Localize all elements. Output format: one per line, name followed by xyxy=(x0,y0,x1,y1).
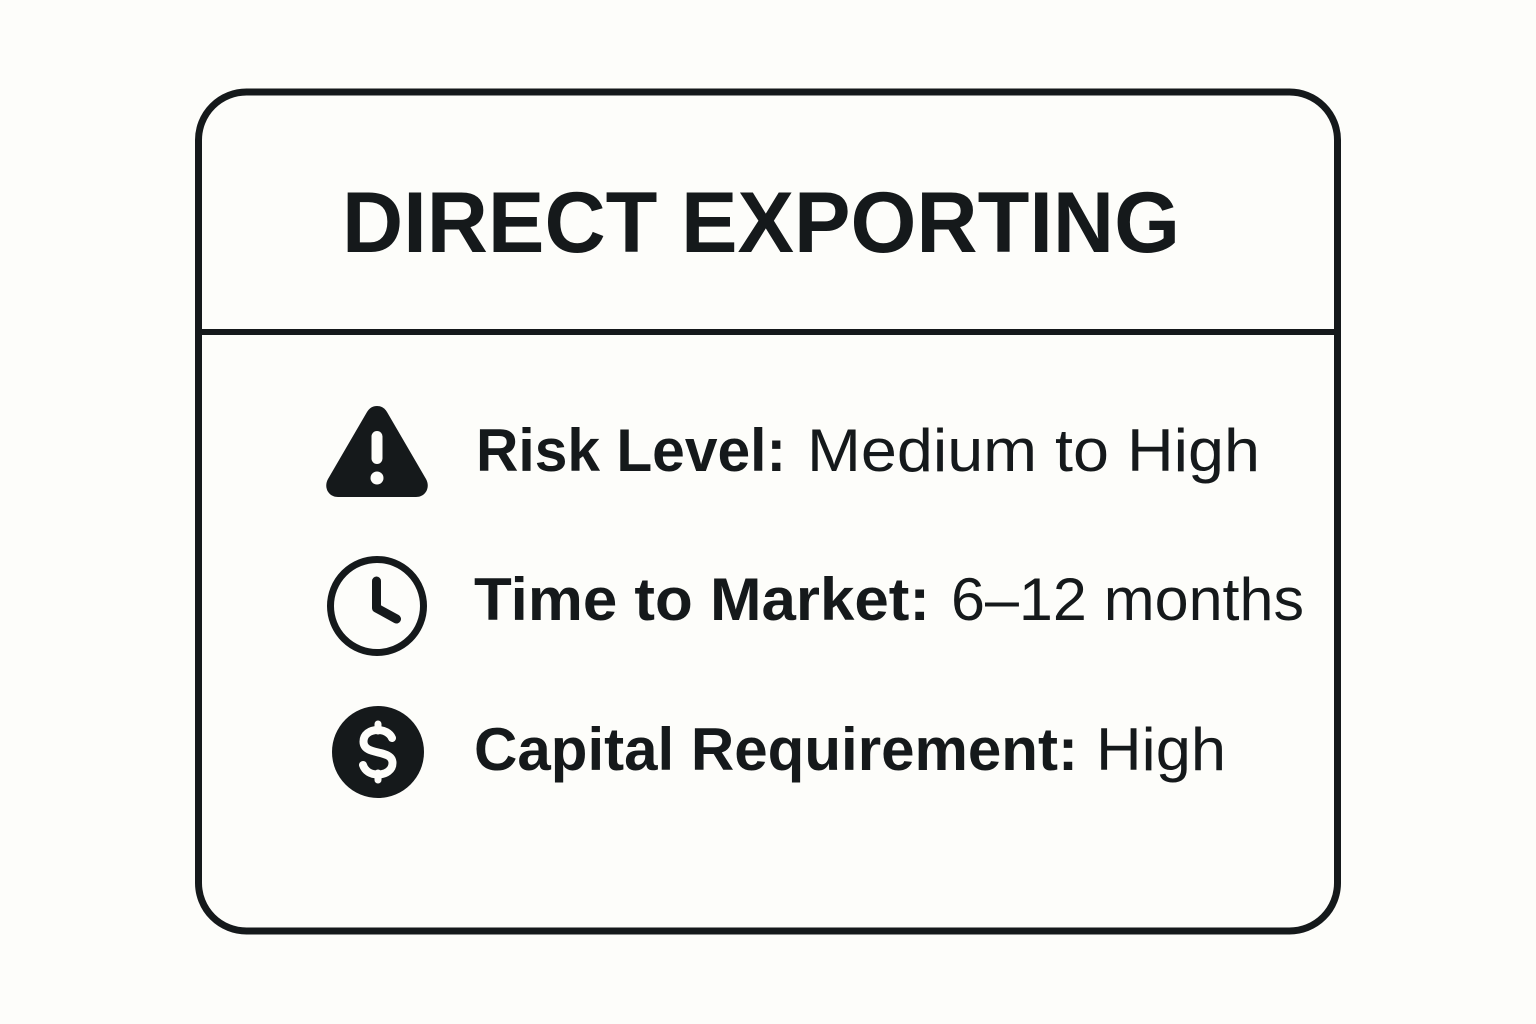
row: time to market: Time to Market: xyxy=(474,566,930,633)
row: time to market: 6–12 months xyxy=(951,566,1304,633)
icon: warning triangle xyxy=(326,406,428,497)
row: risk level: Risk Level: xyxy=(476,417,786,484)
title: DIRECT EXPORTING xyxy=(342,175,1180,271)
icon: clock xyxy=(330,560,424,652)
row: risk level: Medium to High xyxy=(807,417,1260,484)
panel: direct exporting card xyxy=(198,92,1338,931)
icon: dollar coin xyxy=(332,706,424,798)
row: capital requirement: High xyxy=(1096,716,1226,783)
row: capital requirement: Capital Requirement: xyxy=(474,716,1078,783)
